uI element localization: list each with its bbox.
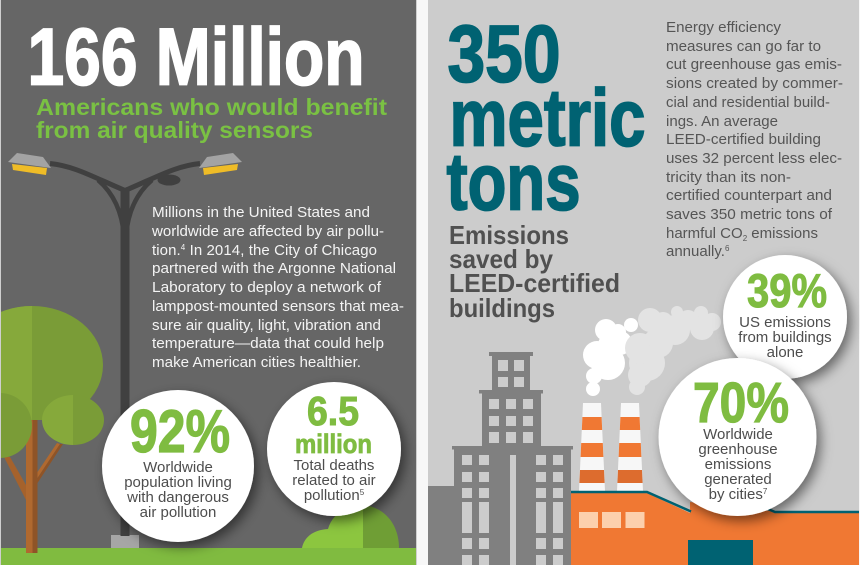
subtitle bbox=[449, 220, 620, 323]
text block: energy efficiency: 2 bbox=[743, 234, 748, 243]
text block: sensors: lamppost-mounted sensors that mea- bbox=[152, 298, 404, 315]
subtitle: Emissions bbox=[449, 220, 569, 250]
subtitle: LEED-certified bbox=[449, 268, 620, 298]
callout: 39%: from buildings bbox=[738, 329, 832, 346]
callout: 92%: 92% bbox=[130, 398, 230, 465]
title: 350 metric tons bbox=[446, 10, 646, 228]
callout: 70%: 7 bbox=[763, 487, 768, 496]
callout: 92%: Worldwide bbox=[143, 459, 213, 476]
icon: right chimney bbox=[617, 403, 643, 491]
text block: energy efficiency: tricity than its non- bbox=[666, 169, 791, 186]
text block: energy efficiency bbox=[666, 19, 843, 260]
callout: 6.5 million: related to air bbox=[292, 472, 376, 489]
text block: energy efficiency: saves 350 metric tons of bbox=[666, 206, 833, 223]
callout: 6.5 million: 5 bbox=[360, 488, 365, 497]
callout: 39%: US emissions bbox=[739, 314, 831, 331]
callout: 39%: 39% bbox=[747, 264, 827, 317]
panel: air quality bbox=[0, 0, 417, 565]
text block: sensors bbox=[151, 204, 404, 371]
text block: sensors: make American cities healthier. bbox=[152, 354, 361, 371]
text block: sensors: Laboratory to deploy a network of bbox=[152, 279, 382, 296]
callout: 70%: greenhouse bbox=[698, 441, 778, 458]
text block: energy efficiency: ings. An average bbox=[666, 113, 778, 130]
title: 350 metric tons: 350 bbox=[448, 10, 560, 100]
icon: grey smoke bbox=[625, 306, 721, 395]
title: 350 metric tons: metric bbox=[450, 74, 646, 164]
text block: sensors: partnered with the Argonne National bbox=[152, 260, 396, 277]
text block: sensors: worldwide are affected by air pollu- bbox=[151, 223, 384, 240]
icon: bush bbox=[302, 505, 399, 548]
icon: street lamp bbox=[8, 153, 242, 548]
callout: 70%: Worldwide bbox=[703, 426, 773, 443]
icon: left chimney bbox=[579, 403, 605, 491]
callout: 39%: alone bbox=[767, 344, 803, 361]
icon: tree bbox=[0, 306, 104, 553]
callout: 70%: by cities bbox=[709, 486, 763, 503]
text block: energy efficiency: measures can go far to bbox=[666, 38, 821, 55]
callout: 6.5 million: pollution bbox=[304, 487, 360, 504]
text block: energy efficiency: cut greenhouse gas emis- bbox=[666, 56, 842, 73]
text block: energy efficiency: LEED-certified building bbox=[666, 131, 821, 148]
text block: energy efficiency: 6 bbox=[725, 244, 730, 253]
text block: sensors: tion. bbox=[152, 242, 181, 259]
callout: 92%: air pollution bbox=[140, 504, 216, 521]
callout: 39% bbox=[723, 255, 847, 379]
callout: 70%: emissions bbox=[705, 456, 771, 473]
text block: energy efficiency: harmful CO bbox=[666, 225, 743, 242]
callout: 70%: 70% bbox=[693, 371, 789, 435]
callout: 6.5 million bbox=[267, 382, 401, 516]
callout: 92% bbox=[102, 390, 254, 542]
callout: 70%: generated bbox=[704, 471, 772, 488]
subtitle bbox=[36, 94, 387, 143]
text block: sensors: sure air quality, light, vibration and bbox=[152, 317, 381, 334]
ground bbox=[1, 548, 416, 565]
text block: energy efficiency: certified counterpart and bbox=[666, 187, 832, 204]
callout: 6.5 million: Total deaths bbox=[294, 457, 374, 474]
text block: energy efficiency: uses 32 percent less elec- bbox=[666, 150, 842, 167]
icon: city buildings bbox=[428, 352, 573, 565]
subtitle: from air quality sensors bbox=[36, 117, 313, 143]
text block: sensors: temperature—data that could help bbox=[152, 335, 384, 352]
callout: 92%: with dangerous bbox=[126, 489, 229, 506]
callout: 6.5 million: million bbox=[295, 429, 372, 459]
text block: energy efficiency: emissions bbox=[747, 225, 818, 242]
icon: factory bbox=[571, 492, 859, 565]
subtitle: buildings bbox=[449, 293, 555, 323]
icon: white smoke bbox=[583, 318, 638, 396]
text block: sensors: Millions in the United States and bbox=[152, 204, 370, 221]
panel: emissions bbox=[428, 0, 859, 565]
text block: sensors: In 2014, the City of Chicago bbox=[185, 242, 377, 259]
callout: 70% bbox=[658, 358, 816, 516]
subtitle: saved by bbox=[449, 244, 553, 274]
text block: energy efficiency: sions created by commer- bbox=[666, 75, 843, 92]
text block: sensors: 4 bbox=[181, 243, 186, 252]
subtitle: Americans who would benefit bbox=[36, 94, 387, 120]
text block: energy efficiency: cial and residential build- bbox=[666, 94, 830, 111]
title: 350 metric tons: tons bbox=[446, 138, 580, 228]
text block: energy efficiency: Energy efficiency bbox=[666, 19, 782, 36]
text block: energy efficiency: annually. bbox=[666, 243, 725, 260]
callout: 92%: population living bbox=[124, 474, 232, 491]
title: 166 Million: 166 Million bbox=[28, 12, 364, 102]
callout: 6.5 million: 6.5 bbox=[307, 388, 359, 434]
